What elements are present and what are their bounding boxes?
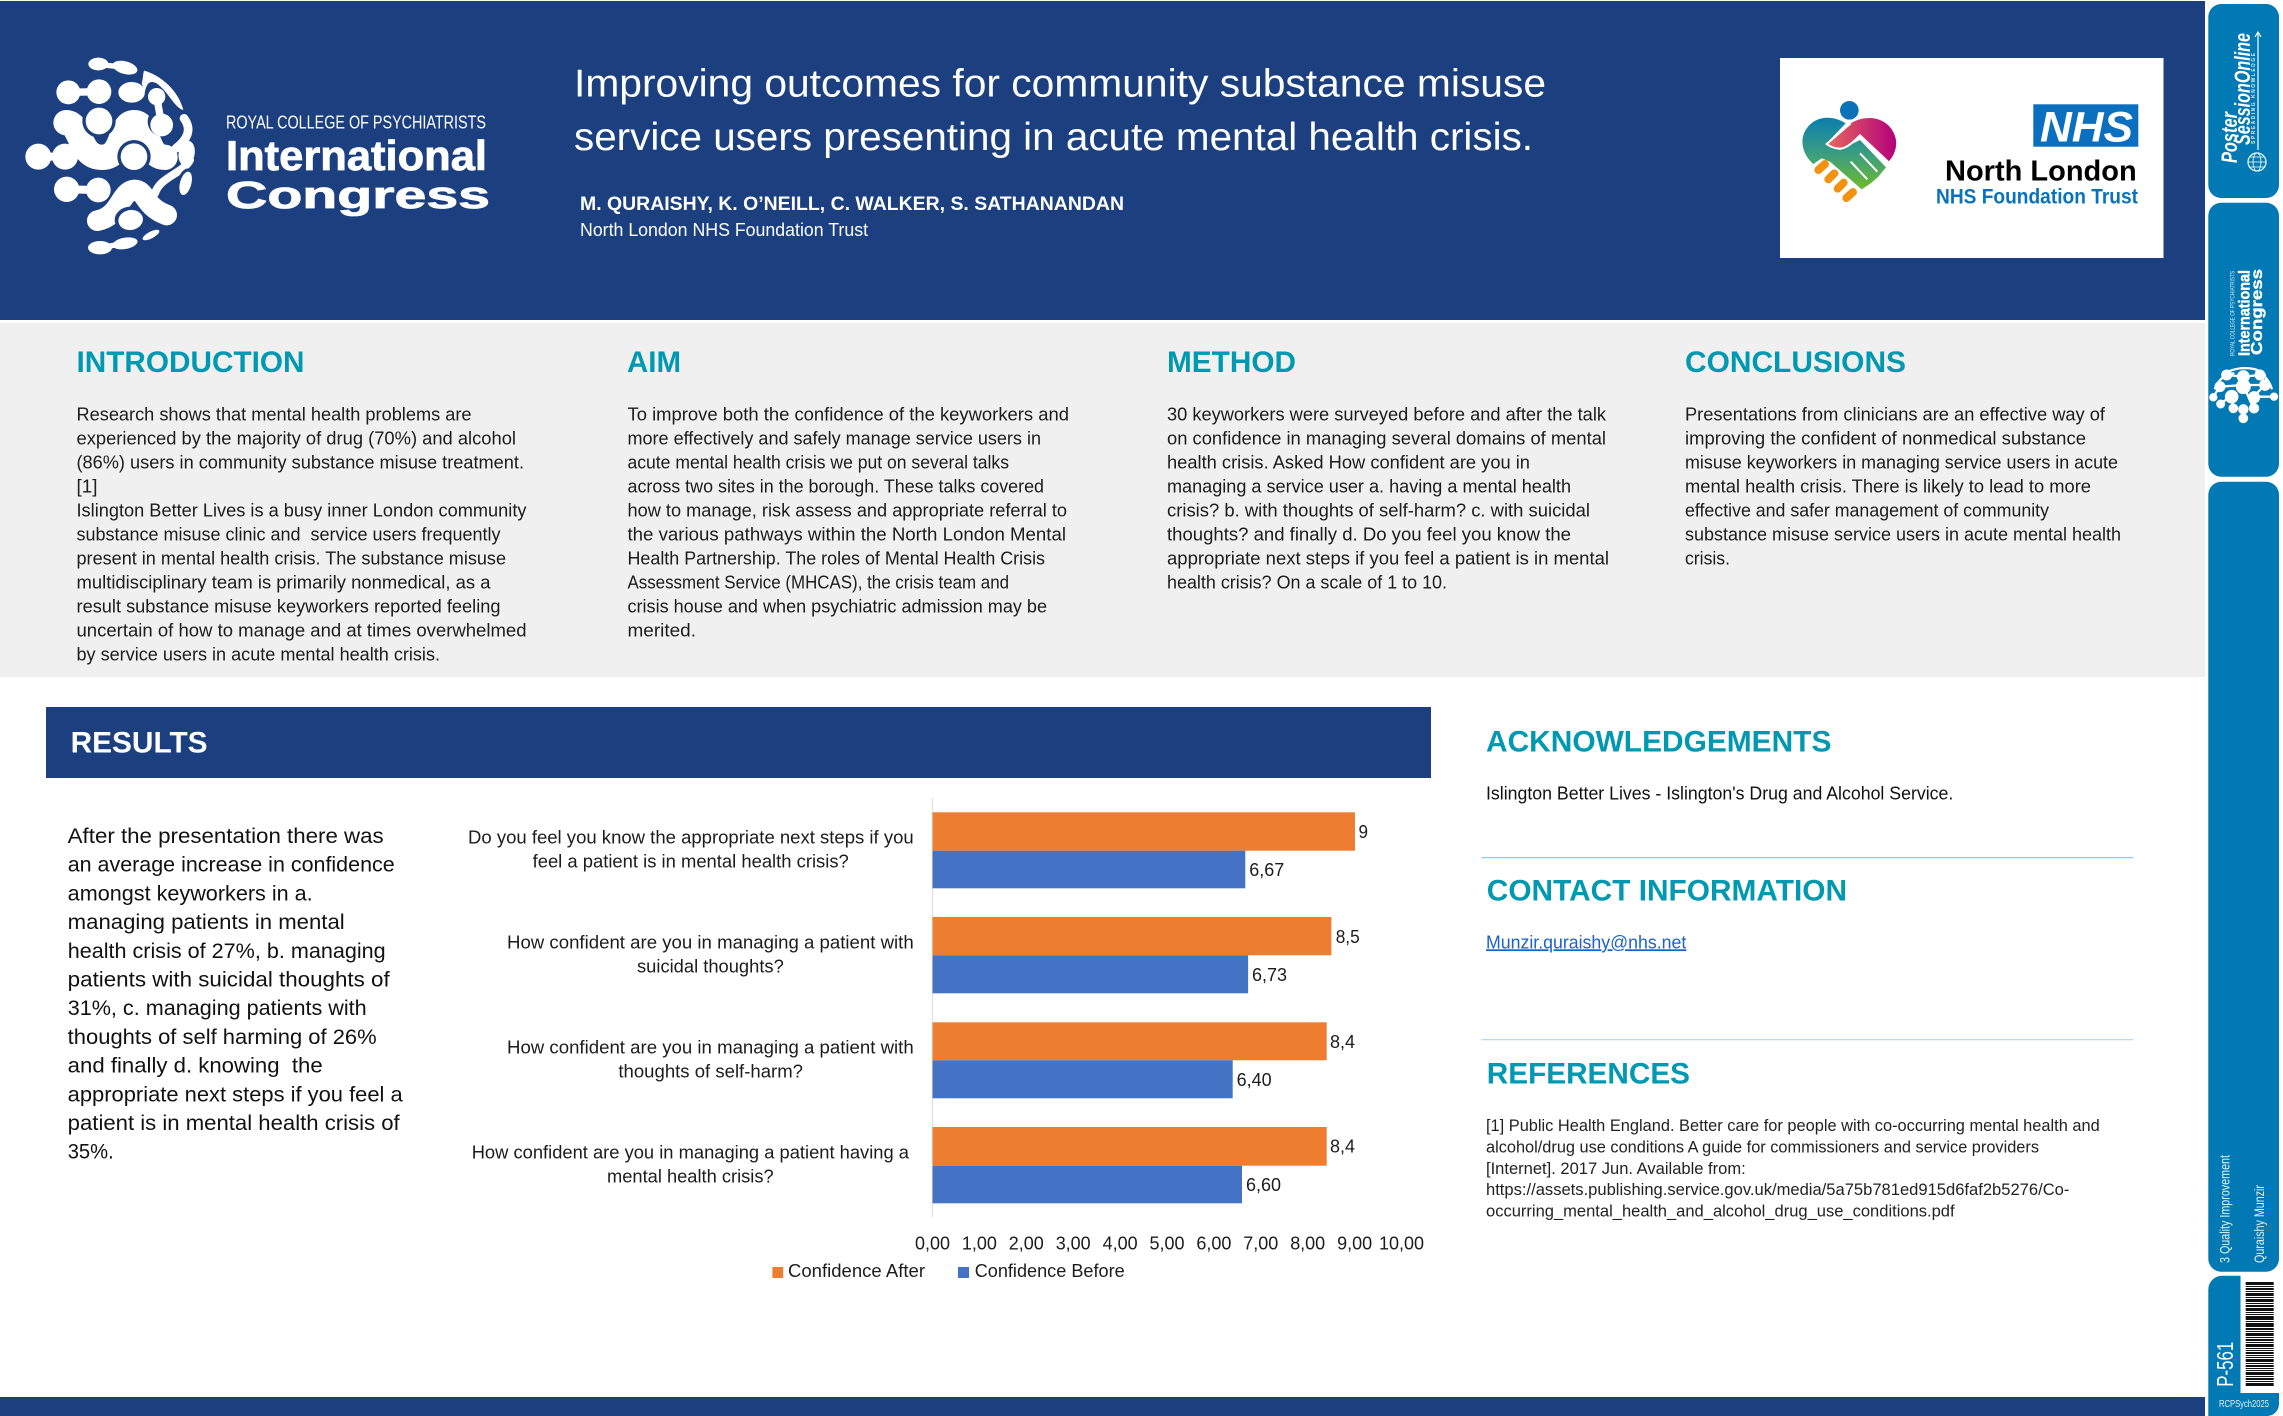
text block: results summary: appropriate next steps if you feel a xyxy=(68,1081,404,1106)
text block: conclusions: crisis. xyxy=(1685,548,1730,569)
icon: congress globe mark xyxy=(25,58,198,254)
bars: suicidal thoughts: 8,5 xyxy=(1336,926,1360,947)
sidebar tab: poster category and author xyxy=(2208,482,2279,1272)
trust subtitle: NHS Foundation Trust xyxy=(1936,185,2138,208)
authors: M. QURAISHY, K. O’NEILL, C. WALKER, S. SATHANANDAN xyxy=(580,194,1124,215)
text block: conclusions xyxy=(1685,404,2121,569)
trust name: North London xyxy=(1945,156,2137,188)
text block: method: crisis? b. with thoughts of self-harm? c. with suicidal xyxy=(1167,500,1590,521)
text block: reference list: [Internet]. 2017 Jun. Available from: xyxy=(1486,1159,1746,1178)
text block: aim: acute mental health crisis we put on several talks xyxy=(628,452,1009,473)
results heading bar: RESULTS xyxy=(71,727,208,760)
x axis labels: 2,00 xyxy=(1009,1232,1044,1253)
text block: method: health crisis? On a scale of 1 to 10. xyxy=(1167,572,1447,593)
heading: introduction: INTRODUCTION xyxy=(76,346,304,379)
logo wordmark: International xyxy=(226,132,487,179)
logo wordmark: ROYAL COLLEGE OF PSYCHIATRISTS xyxy=(226,112,486,132)
category labels: How confident are you in managing a patient with xyxy=(507,1036,914,1057)
text block: aim: Assessment Service (MHCAS), the crisis team and xyxy=(628,572,1009,593)
text block: aim: across two sites in the borough. These talks covered xyxy=(628,476,1044,497)
sidebar tab: International Congress xyxy=(2208,203,2279,477)
text block: introduction xyxy=(76,404,527,665)
icon: NHS lozenge: NHS xyxy=(2040,104,2133,152)
text block: results summary: After the presentation there was xyxy=(68,823,384,848)
x axis labels: 0,00 xyxy=(915,1232,950,1253)
bars: suicidal thoughts xyxy=(932,917,1360,993)
legend xyxy=(772,1260,1125,1281)
text block: introduction: Research shows that mental health problems are xyxy=(76,404,472,425)
x axis labels: 5,00 xyxy=(1150,1232,1184,1253)
sidebar tab: Poster Session Online: Poster xyxy=(2217,111,2242,163)
text block: results summary: patient is in mental health crisis of xyxy=(68,1110,401,1135)
text block: method: appropriate next steps if you feel a patient is in mental xyxy=(1167,548,1609,569)
heading: references: REFERENCES xyxy=(1487,1057,1690,1090)
legend: Confidence After xyxy=(788,1260,925,1281)
text block: results summary: patients with suicidal thoughts of xyxy=(68,966,391,992)
category labels: How confident are you in managing a patient with xyxy=(507,931,914,952)
text block: results summary: health crisis of 27%, b. managing xyxy=(68,938,386,963)
panel: aim xyxy=(627,346,1069,641)
text block: conclusions: misuse keyworkers in managing service users in acute xyxy=(1685,452,2118,473)
heading: conclusions: CONCLUSIONS xyxy=(1685,346,1906,379)
text block: introduction: Islington Better Lives is a busy inner London community xyxy=(76,500,527,521)
bars: self-harm xyxy=(932,1022,1355,1098)
sidebar tab: poster category and author: Quraishy Munzir xyxy=(2252,1185,2267,1263)
logo panel: NHS North London xyxy=(1780,58,2164,258)
text block: introduction: [1] xyxy=(76,476,98,497)
x axis labels: 4,00 xyxy=(1103,1232,1138,1253)
footer band xyxy=(0,1397,2205,1416)
text block: conclusions: improving the confident of nonmedical substance xyxy=(1685,428,2086,449)
text block: reference list: https://assets.publishing.service.gov.uk/media/5a75b781ed915d6faf2b5276/Co- xyxy=(1486,1180,2069,1199)
sidebar tab: poster category and author: 3 Quality Improvement xyxy=(2218,1155,2233,1263)
bars: next steps: 9 xyxy=(1358,821,1368,842)
x axis labels: 8,00 xyxy=(1290,1232,1325,1253)
text block: results summary: 35%. xyxy=(68,1139,114,1164)
text: email link: Munzir.quraishy@nhs.net xyxy=(1486,932,1686,952)
text block: introduction: present in mental health crisis. The substance misuse xyxy=(76,548,506,569)
text block: introduction: uncertain of how to manage and at times overwhelmed xyxy=(76,620,526,641)
icon: congress mark xyxy=(2210,368,2277,422)
heading: aim: AIM xyxy=(627,346,681,379)
logo wordmark: Congress xyxy=(226,175,490,217)
heading: acknowledgements: ACKNOWLEDGEMENTS xyxy=(1486,726,1831,759)
text block: conclusions: substance misuse service users in acute mental health xyxy=(1685,524,2121,545)
text block: aim: Health Partnership. The roles of Mental Health Crisis xyxy=(628,548,1045,569)
panel: top sections background xyxy=(0,323,2205,677)
text block: method xyxy=(1167,404,1609,593)
results heading bar xyxy=(46,707,1431,778)
panel: references xyxy=(1486,1057,2100,1221)
category labels: Do you feel you know the appropriate next steps if you xyxy=(468,826,914,847)
text block: aim: merited. xyxy=(628,620,696,641)
logo wordmark xyxy=(226,112,490,217)
category labels: How confident are you in managing a patient having a xyxy=(472,1141,910,1162)
title xyxy=(574,63,1546,159)
text block: introduction: substance misuse clinic and service users frequently xyxy=(76,524,501,545)
x axis labels: 7,00 xyxy=(1243,1232,1278,1253)
text block: method: health crisis. Asked How confident are you in xyxy=(1167,452,1530,473)
panel: contact information xyxy=(1486,875,1847,952)
bars: self-harm: 6,40 xyxy=(1237,1069,1272,1090)
header band xyxy=(0,1,2205,320)
text block: aim: more effectively and safely manage service users in xyxy=(628,428,1041,449)
sidebar tab: Poster Session Online: SPREADING KNOWLEDGE xyxy=(2251,52,2257,144)
text block: method: thoughts? and finally d. Do you feel you know the xyxy=(1167,524,1571,545)
title: service users presenting in acute mental health crisis. xyxy=(574,116,1533,159)
category labels: thoughts of self-harm? xyxy=(618,1061,803,1082)
panel: conclusions xyxy=(1685,346,2121,569)
text block: reference list: alcohol/drug use conditions A guide for commissioners and service providers xyxy=(1486,1137,2039,1156)
text block: introduction: result substance misuse keyworkers reported feeling xyxy=(76,596,500,617)
legend: Confidence Before xyxy=(975,1260,1125,1281)
sidebar tab: International Congress: Congress xyxy=(2249,269,2266,355)
text block: method: managing a service user a. having a mental health xyxy=(1167,476,1571,497)
barcode xyxy=(2246,1282,2274,1386)
text block: conclusions: mental health crisis. There is likely to lead to more xyxy=(1685,476,2091,497)
text block: aim: how to manage, risk assess and appropriate referral to xyxy=(628,500,1067,521)
bars: mental health crisis: 8,4 xyxy=(1330,1136,1355,1157)
text block: aim xyxy=(628,404,1069,641)
text block: results summary: managing patients in mental xyxy=(68,909,345,934)
x axis labels: 10,00 xyxy=(1379,1232,1424,1253)
text block: reference list: occurring_mental_health_and_alcohol_drug_use_conditions.pdf xyxy=(1486,1202,1955,1221)
text block: results summary: and finally d. knowing the xyxy=(68,1053,323,1078)
text block: method: 30 keyworkers were surveyed before and after the talk xyxy=(1167,404,1607,425)
poster number: P-561 xyxy=(2212,1342,2238,1387)
text block: reference list xyxy=(1486,1116,2100,1221)
bars: mental health crisis: 6,60 xyxy=(1246,1174,1281,1195)
bars: suicidal thoughts: 6,73 xyxy=(1252,964,1287,985)
text block: results summary: amongst keyworkers in a. xyxy=(68,880,313,905)
x axis labels: 6,00 xyxy=(1196,1232,1231,1253)
bar chart: confidence before and after xyxy=(468,798,1424,1281)
x axis labels: 1,00 xyxy=(962,1232,997,1253)
x axis labels xyxy=(915,1232,1424,1253)
text block: method: on confidence in managing several domains of mental xyxy=(1167,428,1606,449)
x axis labels: 9,00 xyxy=(1337,1232,1372,1253)
sidebar tab: Poster Session Online xyxy=(2208,4,2279,198)
category labels: feel a patient is in mental health crisis? xyxy=(533,851,849,872)
bars: next steps: 6,67 xyxy=(1249,859,1284,880)
text block: results summary: 31%, c. managing patients with xyxy=(68,995,367,1020)
text block: aim: the various pathways within the North London Mental xyxy=(628,524,1066,545)
x axis labels: 3,00 xyxy=(1056,1232,1091,1253)
category labels: suicidal thoughts? xyxy=(637,956,784,977)
panel: introduction xyxy=(76,346,527,665)
heading: method: METHOD xyxy=(1167,346,1296,379)
text: acknowledgement body: Islington Better Lives - Islington's Drug and Alcohol Service. xyxy=(1486,783,1953,803)
affiliation: North London NHS Foundation Trust xyxy=(580,220,868,240)
text block: results summary xyxy=(68,823,404,1164)
text block: introduction: by service users in acute mental health crisis. xyxy=(76,644,440,665)
icon: handshake heart xyxy=(1802,101,1896,198)
panel: method xyxy=(1167,346,1609,593)
bars: mental health crisis xyxy=(932,1127,1355,1203)
text block: aim: crisis house and when psychiatric admission may be xyxy=(628,596,1047,617)
category labels xyxy=(468,826,914,1187)
category labels: mental health crisis? xyxy=(607,1166,774,1187)
sidebar tab: International Congress: International xyxy=(2236,270,2254,356)
panel: acknowledgements xyxy=(1486,726,1953,803)
title: Improving outcomes for community substance misuse xyxy=(574,63,1546,106)
bars: self-harm: 8,4 xyxy=(1330,1031,1355,1052)
text block: conclusions: effective and safer management of community xyxy=(1685,500,2050,521)
heading: contact information: CONTACT INFORMATION xyxy=(1487,875,1847,908)
text block: reference list: [1] Public Health England. Better care for people with co-occurring mental health and xyxy=(1486,1116,2100,1135)
sidebar tab: International Congress: ROYAL COLLEGE OF PSYCHIATRISTS xyxy=(2230,271,2237,356)
bars: next steps xyxy=(932,812,1368,888)
sidebar tab: poster number and barcode xyxy=(2208,1276,2279,1416)
text block: results summary: thoughts of self harming of 26% xyxy=(68,1024,377,1049)
text block: introduction: multidisciplinary team is primarily nonmedical, as a xyxy=(76,572,491,593)
text block: conclusions: Presentations from clinicians are an effective way of xyxy=(1685,404,2106,425)
panel: results xyxy=(46,707,1431,1281)
text block: aim: To improve both the confidence of the keyworkers and xyxy=(628,404,1069,425)
text block: introduction: experienced by the majority of drug (70%) and alcohol xyxy=(76,428,516,449)
text block: introduction: (86%) users in community substance misuse treatment. xyxy=(76,452,524,473)
text block: results summary: an average increase in confidence xyxy=(68,852,395,877)
logo: Royal College of Psychiatrists International Congress xyxy=(25,58,490,254)
